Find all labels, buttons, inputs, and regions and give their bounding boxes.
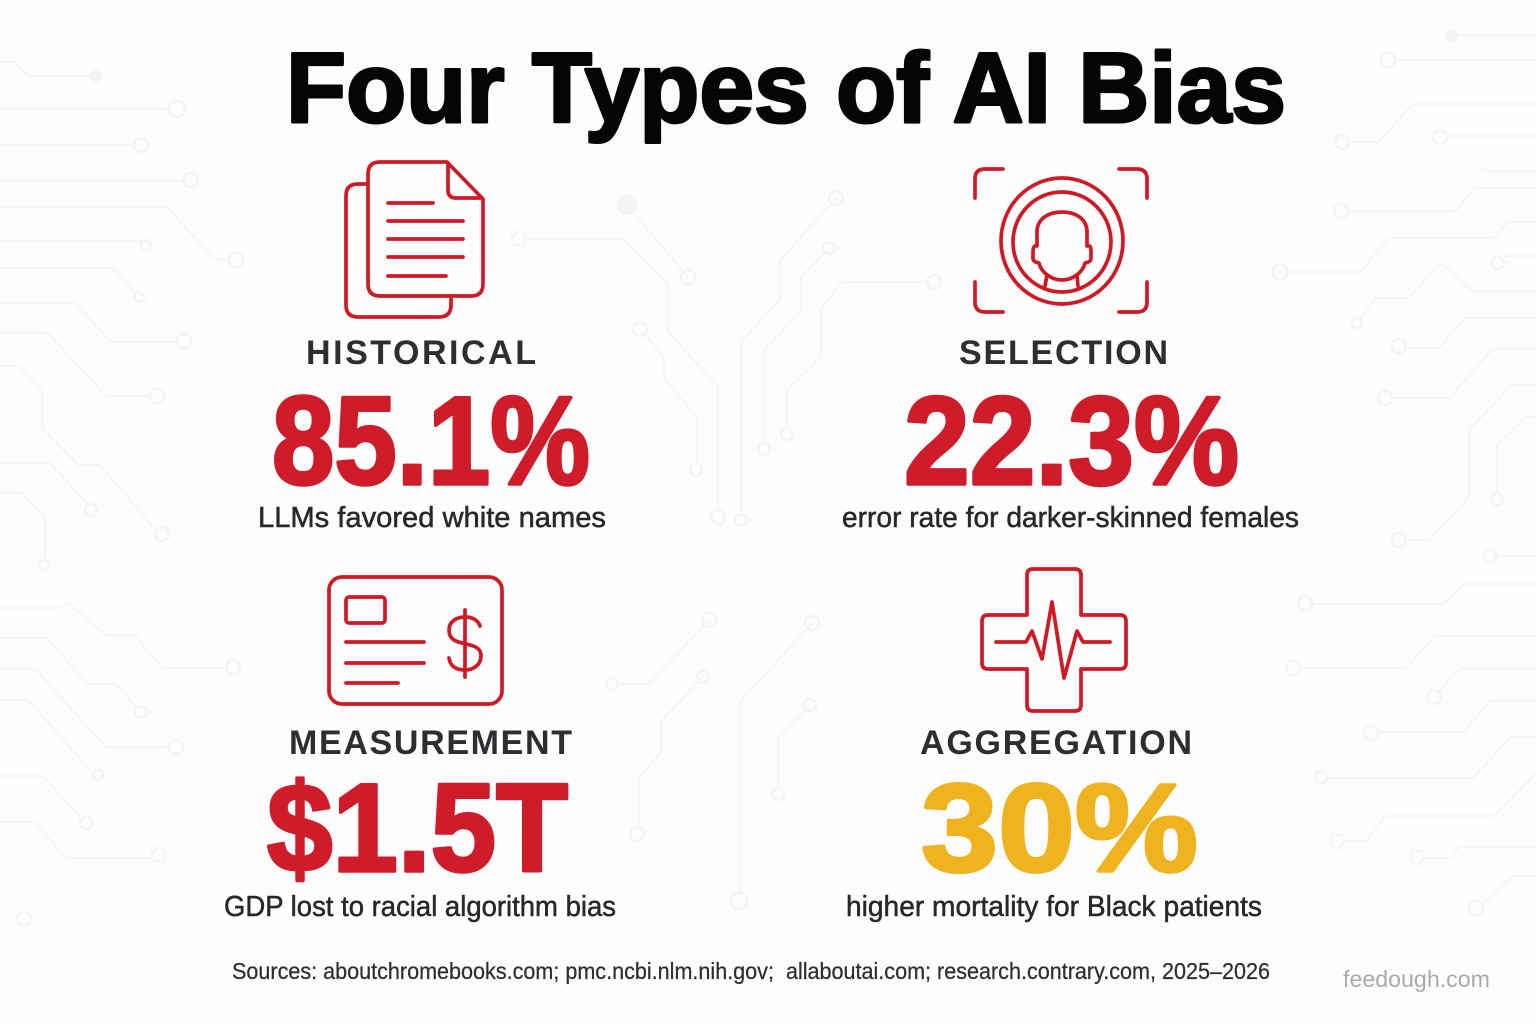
stat: 22.3%: 22.3% bbox=[904, 372, 1239, 511]
icon: stacked documents bbox=[346, 162, 483, 317]
description: aggregation: higher mortality for Black patients bbox=[846, 891, 1262, 923]
description: measurement: GDP lost to racial algorithm bias bbox=[224, 891, 616, 923]
stat: 85.1%: 85.1% bbox=[272, 372, 590, 511]
heading: measurement: MEASUREMENT bbox=[289, 724, 572, 762]
panel: historical bias bbox=[258, 162, 606, 534]
heading: aggregation: AGGREGATION bbox=[920, 724, 1192, 762]
panel: selection bias bbox=[842, 169, 1299, 534]
panel: measurement bias bbox=[224, 577, 616, 923]
watermark: feedough.com bbox=[1343, 966, 1490, 992]
heading: historical: HISTORICAL bbox=[306, 334, 536, 372]
description: selection: error rate for darker-skinned females bbox=[842, 502, 1299, 534]
heading: selection: SELECTION bbox=[959, 334, 1168, 372]
title: Four Types of AI Bias bbox=[286, 32, 1286, 143]
icon: medical cross with pulse bbox=[982, 569, 1126, 711]
stat: 30%: 30% bbox=[921, 759, 1198, 898]
icon: face scan bbox=[975, 169, 1147, 312]
description: historical: LLMs favored white names bbox=[258, 502, 606, 534]
panel: aggregation bias bbox=[846, 569, 1262, 923]
icon: bill with dollar sign bbox=[329, 577, 502, 704]
sources: Sources: aboutchromebooks.com; pmc.ncbi.nlm.nih.gov; allaboutai.com; research.contrary.com, 2025–2026 bbox=[232, 958, 1270, 984]
stat: $1.5T: $1.5T bbox=[267, 759, 568, 898]
